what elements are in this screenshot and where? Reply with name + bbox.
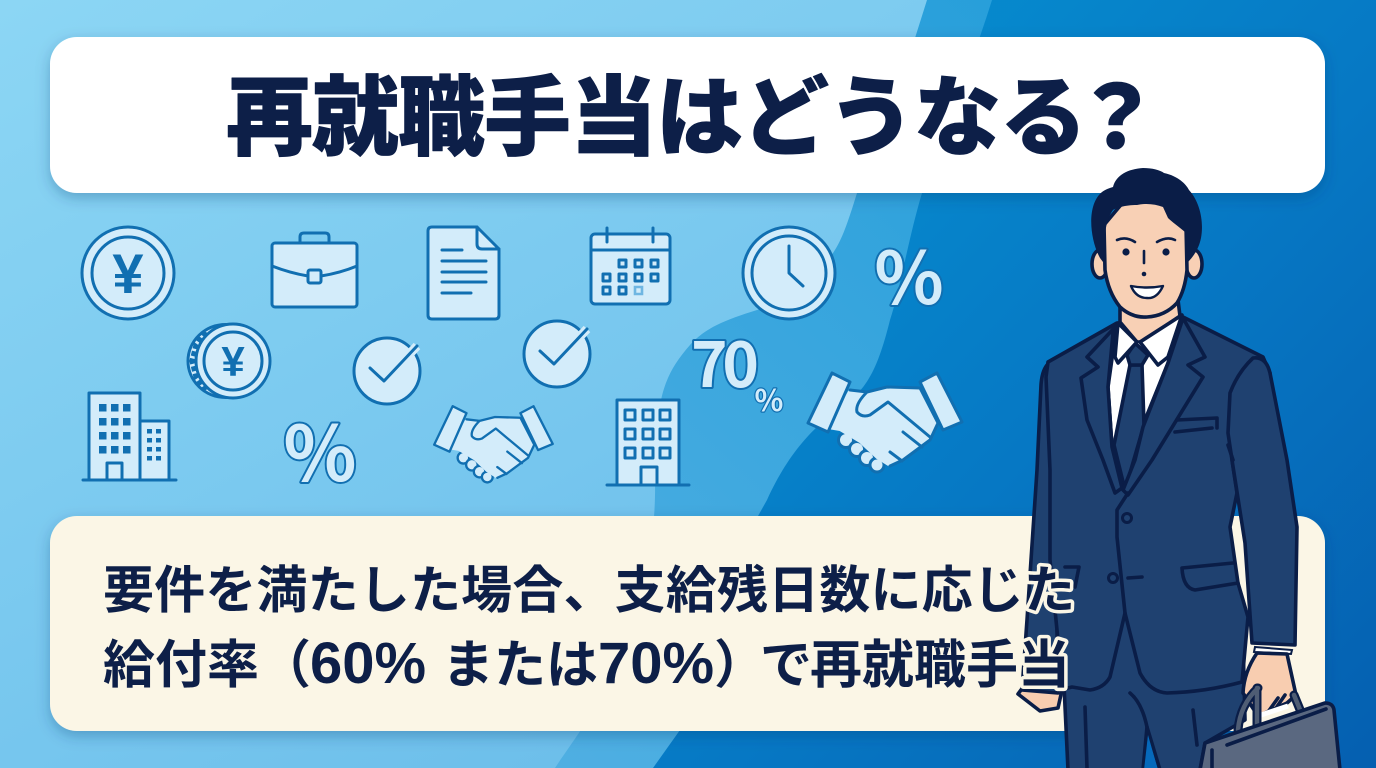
description text line 2: 給付率（ <box>103 637 311 695</box>
fingers <box>1268 695 1285 712</box>
description text line 2: ） <box>714 637 766 695</box>
icon: yen coin small: ¥ <box>221 338 245 385</box>
shirt cuff <box>1254 647 1292 654</box>
right lapel <box>1123 318 1205 495</box>
icon: document <box>428 227 499 319</box>
icon: check circle left <box>354 338 420 404</box>
businessman illustration <box>1018 168 1340 768</box>
right hand <box>1243 653 1296 716</box>
icon: handshake small <box>434 406 553 482</box>
background: medium blue wave <box>555 0 1376 768</box>
ears <box>1092 250 1202 278</box>
left lapel <box>1081 325 1122 493</box>
description text line 2: で <box>760 637 812 695</box>
icon: yen coin small <box>188 324 270 398</box>
jacket front line <box>1117 445 1233 613</box>
pockets <box>1065 418 1238 590</box>
description text line 2: 再就職手当 <box>810 637 1070 695</box>
icon: 70 percent: % <box>755 376 783 420</box>
trouser creases <box>1085 693 1197 768</box>
panel: description <box>50 516 1325 731</box>
trousers <box>1060 600 1245 768</box>
facial features <box>1117 238 1175 298</box>
icon: percent lower left: % <box>283 393 357 503</box>
face <box>1104 200 1187 317</box>
gap between legs <box>1144 735 1158 768</box>
icon: 70 percent: 70 <box>691 315 759 405</box>
icon: clock <box>743 227 835 319</box>
left sleeve <box>1022 362 1068 693</box>
description text line 1: 要件を満たした場合、支給残日数に応じた <box>103 562 1075 619</box>
icon: briefcase <box>272 233 357 307</box>
neck <box>1120 300 1180 342</box>
icon: check circle right <box>524 321 590 387</box>
shirt collar <box>1115 315 1182 365</box>
icon: office buildings <box>83 393 176 480</box>
panel: title <box>50 37 1325 193</box>
description text line 2: 60% <box>310 631 426 696</box>
description text line 2: または <box>442 637 598 695</box>
right sleeve <box>1228 358 1297 645</box>
left hand <box>1018 686 1062 711</box>
hair <box>1091 168 1202 262</box>
icon: yen coin large: ¥ <box>112 242 144 305</box>
tie <box>1114 343 1148 490</box>
torso jacket <box>1046 317 1270 693</box>
icon: calendar <box>591 228 670 304</box>
title: ？ <box>1073 70 1159 167</box>
shirt <box>1108 318 1182 480</box>
icon: percent top right: % <box>874 220 944 325</box>
icon: yen coin large <box>82 227 174 319</box>
background: deep blue wave <box>653 0 1376 768</box>
icon: handshake large <box>808 373 962 472</box>
icon: office building <box>607 400 689 485</box>
buttons <box>1108 514 1142 582</box>
briefcase <box>1200 688 1340 768</box>
title: 再就職手当はどうなる <box>226 70 1086 167</box>
description text line 2: 70% <box>598 631 714 696</box>
icon: 70 percent <box>691 315 783 420</box>
